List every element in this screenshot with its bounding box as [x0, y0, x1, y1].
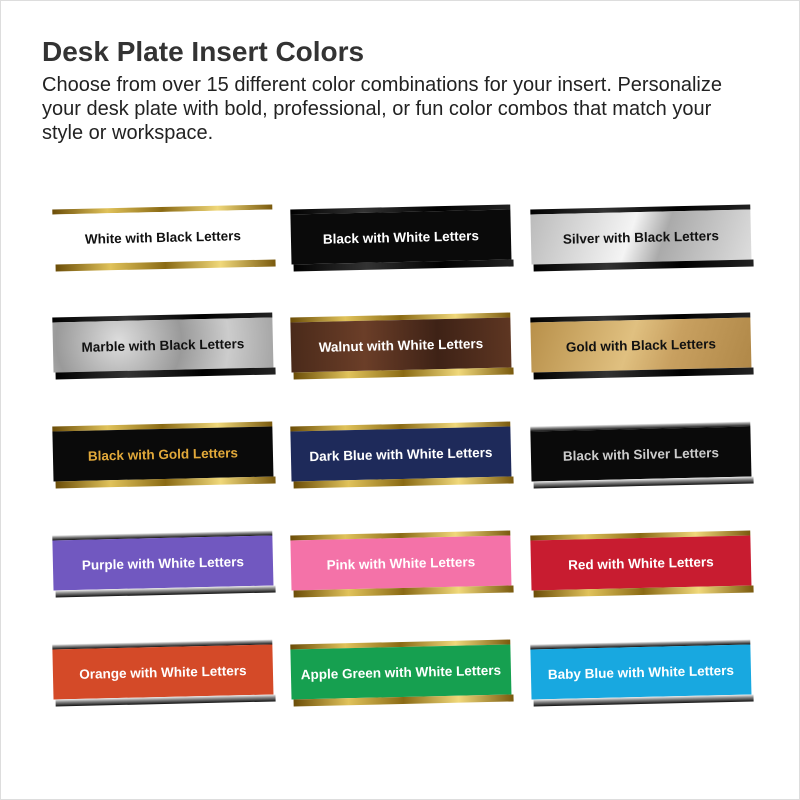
plate: orange with white letters: [52, 640, 276, 706]
plate: black with gold letters: Black with Gold Letters: [88, 445, 238, 463]
plate: black with gold letters: [52, 422, 276, 488]
plate: marble with black letters: [52, 312, 276, 380]
plate: red with white letters: Red with White Letters: [568, 554, 714, 572]
plate: purple with white letters: [52, 530, 276, 598]
plate: apple green with white letters: Apple Green with White Letters: [301, 662, 501, 682]
plate: white with black letters: [52, 204, 276, 272]
plate: orange with white letters: Orange with White Letters: [79, 663, 247, 681]
plate: gold with black letters: Gold with Black Letters: [566, 336, 716, 354]
plate: marble with black letters: Marble with Black Letters: [81, 336, 244, 354]
plate: purple with white letters: Purple with White Letters: [82, 554, 244, 572]
plate: dark blue with white letters: Dark Blue with White Letters: [309, 444, 493, 464]
intro text: [42, 74, 722, 144]
plate: white with black letters: White with Black Letters: [85, 228, 241, 246]
intro text: style or workspace.: [42, 122, 213, 144]
plate: walnut with white letters: Walnut with White Letters: [319, 336, 483, 354]
plate: gold with black letters: [530, 312, 754, 380]
plate: pink with white letters: [290, 530, 514, 598]
plate: baby blue with white letters: [530, 640, 754, 706]
plate: apple green with white letters: [290, 640, 514, 706]
plate: black with silver letters: [530, 422, 754, 488]
intro text: your desk plate with bold, professional, or fun color combos that match your: [42, 98, 711, 120]
plate: silver with black letters: Silver with Black Letters: [563, 228, 719, 246]
plate: red with white letters: [530, 530, 754, 598]
plate: pink with white letters: Pink with White Letters: [327, 554, 475, 572]
plate: black with silver letters: Black with Silver Letters: [563, 445, 719, 463]
plate: silver with black letters: [530, 204, 754, 272]
intro text: Choose from over 15 different color combinations for your insert. Personalize: [42, 74, 722, 96]
plate: walnut with white letters: [290, 312, 514, 380]
title: Desk Plate Insert Colors: [42, 36, 364, 67]
plate: black with white letters: Black with White Letters: [323, 228, 479, 246]
plate: baby blue with white letters: Baby Blue with White Letters: [548, 662, 734, 682]
plate: black with white letters: [290, 204, 514, 272]
plate: dark blue with white letters: [290, 422, 514, 488]
